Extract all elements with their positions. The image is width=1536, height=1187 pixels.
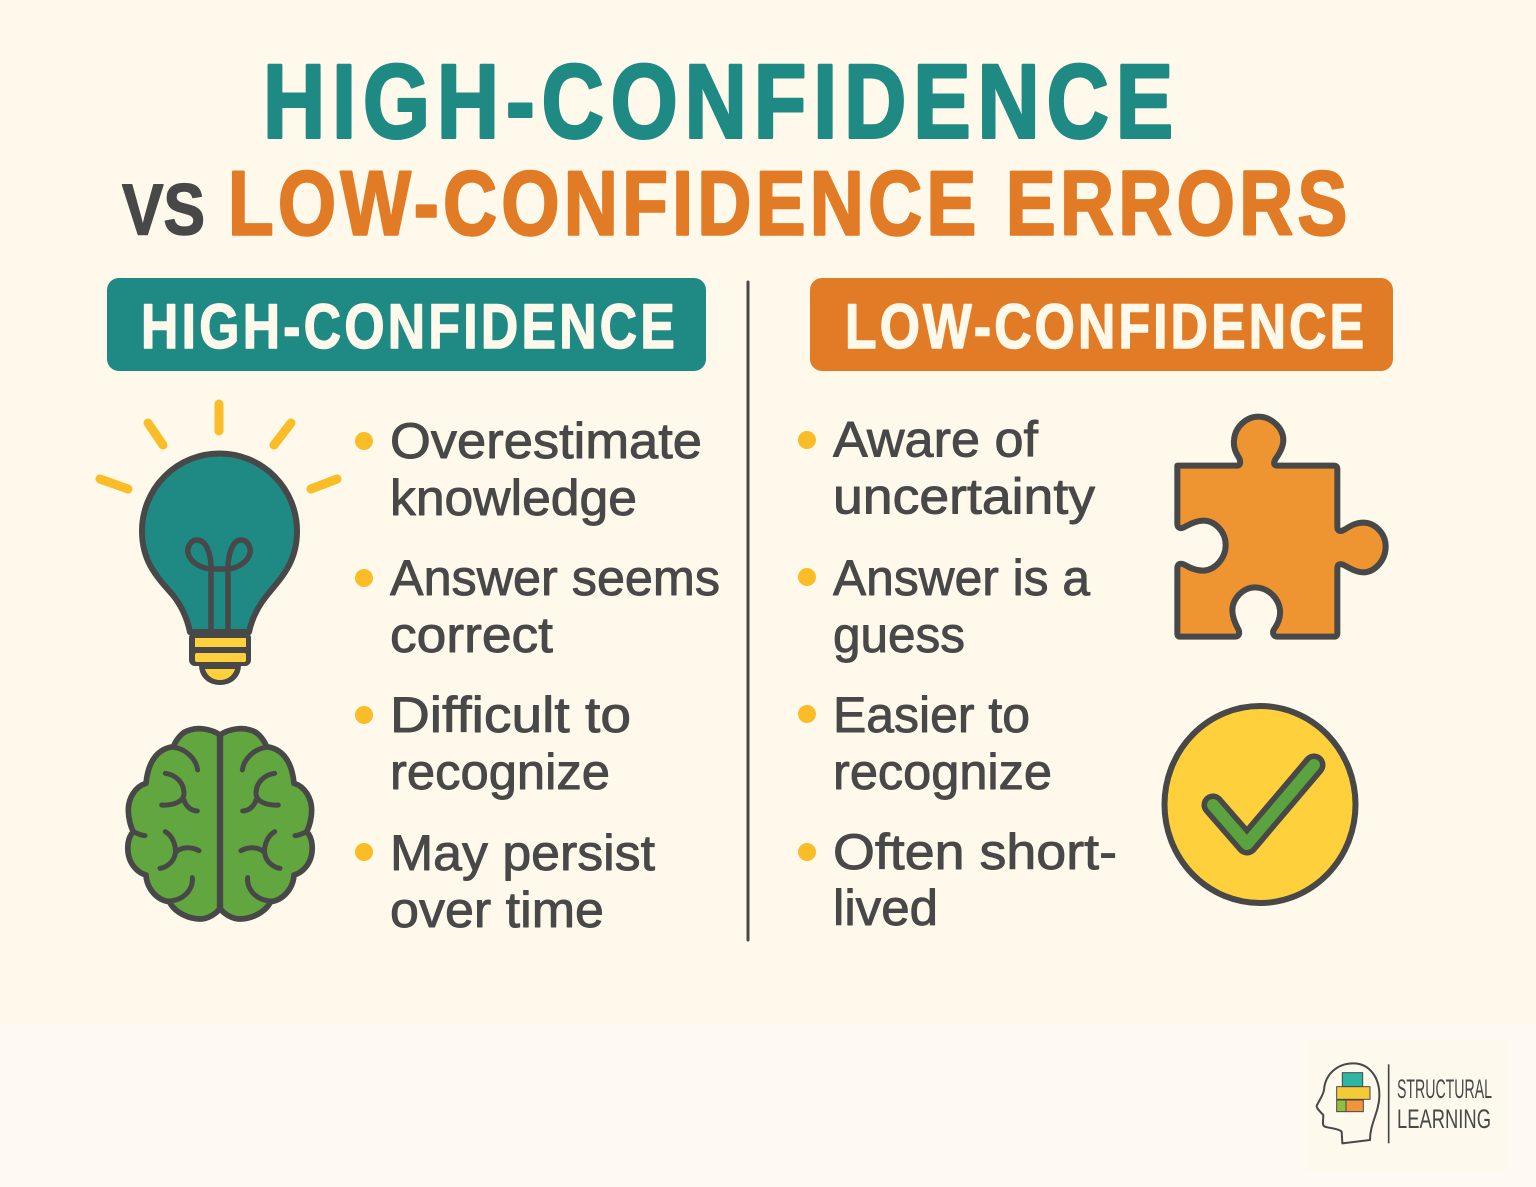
icon: check mark <box>1164 706 1356 903</box>
header: low-confidence: LOW-CONFIDENCE <box>845 292 1364 362</box>
bullet: overestimate knowledge <box>355 413 702 526</box>
icon: brain <box>128 729 312 919</box>
logo text: LEARNING <box>1397 1104 1491 1134</box>
bullet: easier to recognize <box>798 687 1052 800</box>
bullet: aware of uncertainty: Aware of <box>833 412 1038 468</box>
bullet: may persist over time <box>355 825 655 938</box>
bullet: overestimate knowledge: Overestimate <box>390 413 702 469</box>
title line 2: low-confidence errors: LOW-CONFIDENCE ERRORS <box>228 152 1347 254</box>
bullet: easier to recognize: Easier to <box>833 687 1030 743</box>
bullet: answer is a guess <box>798 550 1090 663</box>
bullet: aware of uncertainty <box>798 412 1095 524</box>
bullet: answer is a guess: Answer is a <box>833 550 1090 606</box>
bullet: aware of uncertainty: uncertainty <box>833 468 1095 524</box>
title word: vs: VS <box>122 170 205 250</box>
bullet: often short-lived: Often short- <box>833 824 1117 880</box>
title line 1: high-confidence: HIGH-CONFIDENCE <box>263 43 1173 160</box>
bullet: difficult to recognize: Difficult to <box>390 687 631 743</box>
header: low-confidence <box>810 278 1393 371</box>
header: high-confidence: HIGH-CONFIDENCE <box>141 292 675 362</box>
icon: light bulb <box>100 404 337 685</box>
logo icon: head with blocks <box>1317 1063 1389 1143</box>
bullet: easier to recognize: recognize <box>833 744 1052 800</box>
bullet: difficult to recognize: recognize <box>390 744 610 800</box>
bullet: answer is a guess: guess <box>833 607 965 663</box>
bullet list: low-confidence traits <box>798 412 1117 936</box>
panel: low-confidence <box>798 278 1393 936</box>
panel: high-confidence <box>100 278 720 938</box>
bullet: often short-lived <box>798 824 1117 936</box>
bullet: overestimate knowledge: knowledge <box>390 470 637 526</box>
bullet list: high-confidence traits <box>355 413 720 938</box>
icon: puzzle piece <box>1177 417 1386 637</box>
bullet: often short-lived: lived <box>833 880 938 936</box>
header: high-confidence <box>107 278 706 371</box>
title <box>122 43 1347 254</box>
logo text <box>1397 1074 1492 1134</box>
bullet: answer seems correct: Answer seems <box>390 550 720 606</box>
logo: structural learning <box>1306 1040 1506 1172</box>
bullet: answer seems correct: correct <box>390 607 553 663</box>
bullet: answer seems correct <box>355 550 720 663</box>
bullet: may persist over time: over time <box>390 882 604 938</box>
bullet: may persist over time: May persist <box>390 825 655 881</box>
bullet: difficult to recognize <box>355 687 631 800</box>
